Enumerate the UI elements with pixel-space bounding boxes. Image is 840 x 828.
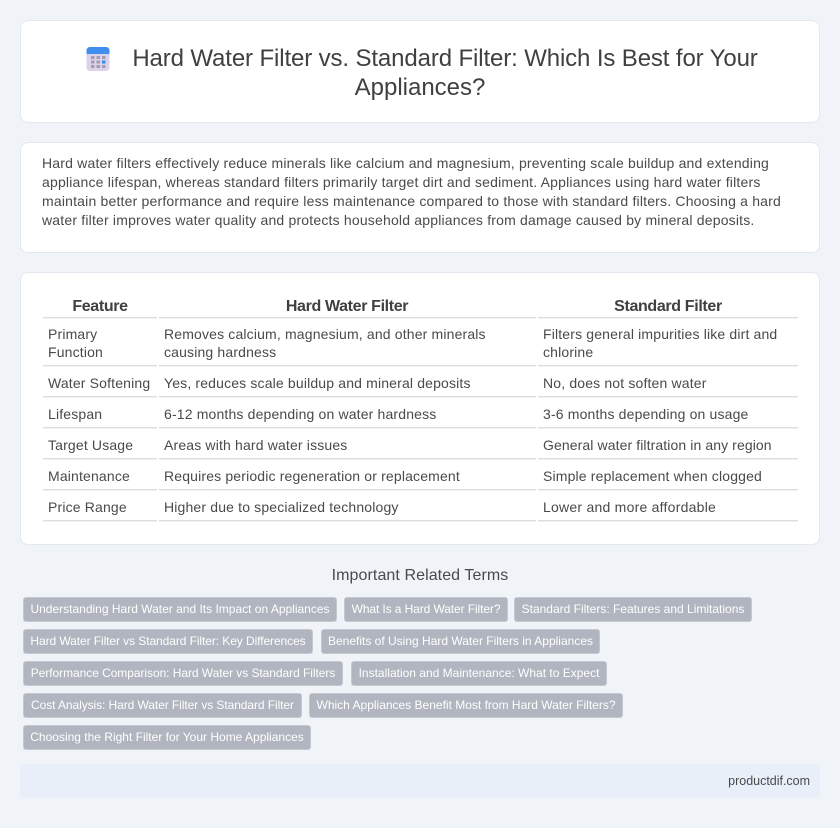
footer source text: productdif.com bbox=[728, 774, 810, 788]
tag: Which Appliances Benefit Most from Hard Water Filters? bbox=[316, 698, 616, 712]
tag: Hard Water Filter vs Standard Filter: Key Differences bbox=[30, 634, 306, 648]
row: price range bbox=[48, 499, 716, 515]
tag bbox=[23, 725, 311, 750]
tag: Performance Comparison: Hard Water vs Standard Filters bbox=[31, 666, 335, 680]
column header: Feature: Feature bbox=[72, 298, 128, 315]
tag: What Is a Hard Water Filter? bbox=[352, 602, 500, 616]
tag: Benefits of Using Hard Water Filters in Appliances bbox=[328, 634, 593, 648]
row: lifespan: 3-6 months depending on usage bbox=[543, 406, 748, 422]
row: water softening: No, does not soften water bbox=[543, 375, 707, 391]
text block: intro: appliance lifespan, whereas standard filters primarily target dirt and sediment. Appliances using hard water filters bbox=[42, 174, 761, 190]
panel: comparison table bbox=[20, 272, 820, 545]
tag: Cost Analysis: Hard Water Filter vs Standard Filter bbox=[31, 698, 294, 712]
row: primary function: Primary bbox=[48, 326, 97, 342]
row: primary function: Filters general impurities like dirt and bbox=[543, 326, 777, 342]
row: lifespan: 6-12 months depending on water hardness bbox=[164, 406, 436, 422]
row: lifespan: Lifespan bbox=[48, 406, 102, 422]
row: price range: Price Range bbox=[48, 499, 127, 515]
row: primary function: chlorine bbox=[543, 344, 593, 360]
row: maintenance: Simple replacement when clogged bbox=[543, 468, 762, 484]
row: maintenance: Requires periodic regeneration or replacement bbox=[164, 468, 460, 484]
row: price range: Lower and more affordable bbox=[543, 499, 716, 515]
title: Appliances? bbox=[355, 74, 485, 101]
tag: Choosing the Right Filter for Your Home Appliances bbox=[30, 730, 304, 744]
tag: Understanding Hard Water and Its Impact on Appliances bbox=[30, 602, 330, 616]
icon: calendar bbox=[86, 47, 110, 71]
text block: intro: maintain better performance and require less maintenance compared to those with standard filters. Choosing a hard bbox=[42, 193, 781, 209]
text block: intro: water filter improves water quality and protects household appliances from damage caused by mineral deposits. bbox=[42, 212, 755, 228]
tag bbox=[309, 693, 623, 718]
related terms tags bbox=[23, 597, 752, 750]
tag bbox=[23, 661, 343, 686]
title: Hard Water Filter vs. Standard Filter: Which Is Best for Your bbox=[132, 45, 758, 72]
tag bbox=[351, 661, 607, 686]
row: maintenance bbox=[48, 468, 762, 484]
row: water softening: Yes, reduces scale buildup and mineral deposits bbox=[164, 375, 471, 391]
row: target usage: General water filtration in any region bbox=[543, 437, 772, 453]
tag bbox=[23, 597, 337, 622]
row: target usage: Target Usage bbox=[48, 437, 133, 453]
tag: Standard Filters: Features and Limitations bbox=[522, 602, 744, 616]
row: primary function bbox=[48, 326, 777, 360]
row: price range: Higher due to specialized technology bbox=[164, 499, 399, 515]
row: water softening: Water Softening bbox=[48, 375, 150, 391]
row: primary function: Function bbox=[48, 344, 103, 360]
row: water softening bbox=[48, 375, 707, 391]
row: target usage bbox=[48, 437, 772, 453]
title bbox=[132, 45, 758, 101]
tag: Installation and Maintenance: What to Expect bbox=[359, 666, 599, 680]
row: target usage: Areas with hard water issues bbox=[164, 437, 347, 453]
panel: title header bbox=[20, 20, 820, 123]
heading: important related terms: Important Related Terms bbox=[332, 567, 508, 584]
row: maintenance: Maintenance bbox=[48, 468, 130, 484]
tag bbox=[321, 629, 600, 654]
comparison table bbox=[43, 298, 798, 522]
tag bbox=[514, 597, 752, 622]
text block: intro bbox=[42, 155, 781, 228]
row: primary function: Removes calcium, magnesium, and other minerals bbox=[164, 326, 486, 342]
tag bbox=[23, 629, 313, 654]
text block: intro: Hard water filters effectively reduce minerals like calcium and magnesium, preventing scale buildup and extending bbox=[42, 155, 769, 171]
column header: Standard Filter: Standard Filter bbox=[614, 298, 722, 315]
row: lifespan bbox=[48, 406, 748, 422]
tag bbox=[344, 597, 508, 622]
panel: intro paragraph bbox=[20, 142, 820, 253]
column header: Hard Water Filter: Hard Water Filter bbox=[286, 298, 408, 315]
row: primary function: causing hardness bbox=[164, 344, 276, 360]
footer bar bbox=[20, 764, 820, 798]
tag bbox=[23, 693, 302, 718]
